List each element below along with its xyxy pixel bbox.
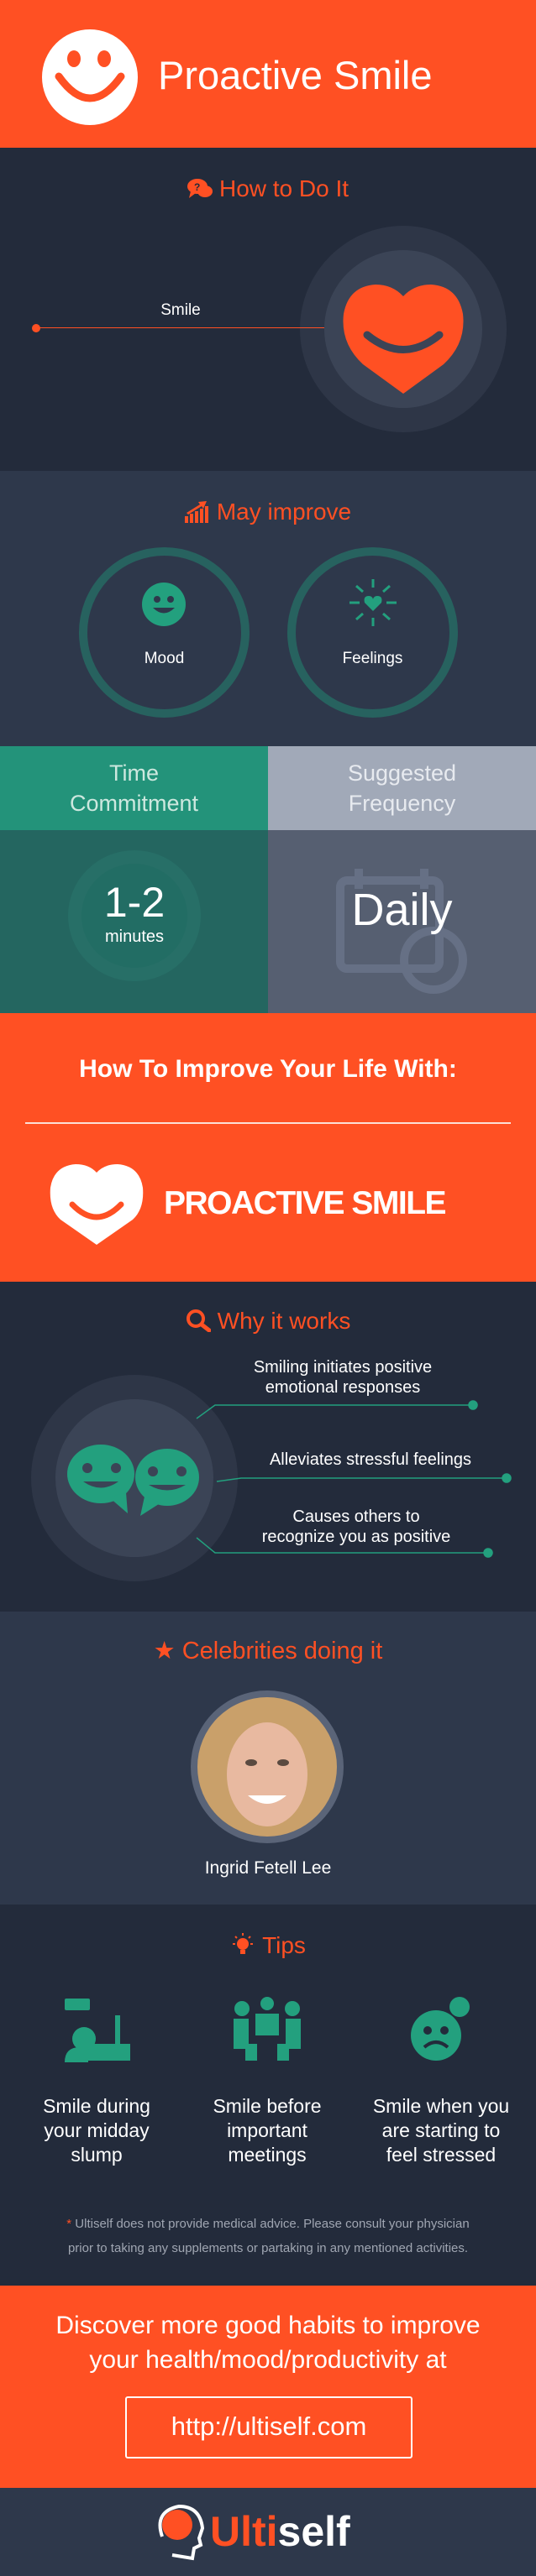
value: Daily [351,885,453,935]
panel: time commitment [0,746,268,1013]
footer logo [0,2488,536,2576]
heading: How To Improve Your Life With: [79,1055,457,1083]
panel: suggested frequency [268,746,536,1013]
text: meetings [228,2144,307,2166]
heading: Tips [262,1932,306,1958]
clock + value [68,850,201,981]
header [268,746,536,830]
icon: feelings [349,579,397,626]
header [0,0,536,148]
reason 3: Causes others to [292,1507,420,1526]
logo text: Ultiself [210,2508,350,2555]
text: Smile when you [373,2095,509,2117]
heading: How to Do It [219,175,349,201]
text [373,2095,509,2166]
tip 3 [373,1997,509,2166]
heading: Why it works [218,1308,350,1334]
reason 1 [254,1358,432,1397]
header: Frequency [349,791,455,816]
header: Suggested [348,760,456,786]
icon [234,1997,301,2061]
label: Feelings [343,650,402,667]
tip 1 [43,1999,150,2166]
label: Mood [145,650,184,667]
reason 1: emotional responses [265,1378,420,1397]
title: PROACTIVE SMILE [164,1185,445,1221]
heading [233,1932,306,1958]
icon [65,1999,130,2062]
text: smile: Smile [160,301,201,319]
reason 3 [262,1507,450,1546]
text [213,2095,322,2166]
reason 3: recognize you as positive [262,1528,450,1546]
connector lines [197,1400,512,1558]
tip 2 [213,1997,322,2166]
reason 1: Smiling initiates positive [254,1358,432,1377]
text: feel stressed [386,2144,496,2166]
icon [411,1997,470,2061]
heading: ★ Celebrities doing it [154,1638,382,1664]
disclaimer: * Ultiself does not provide medical advice. Please consult your physician [66,2217,470,2231]
icon: brain head [158,2505,204,2560]
text [55,2312,481,2374]
panel: may improve [0,471,536,746]
text: slump [71,2144,123,2166]
icon: smiley [42,29,138,125]
panel: how to improve [0,1013,536,1282]
text: your health/mood/productivity at [89,2346,447,2374]
heading: May improve [217,499,351,525]
link box: http://ultiself.com [171,2411,366,2441]
text: Discover more good habits to improve [55,2312,481,2339]
reason 2: Alleviates stressful feelings [270,1450,471,1469]
clock + value: 1-2 [104,879,165,926]
icon: mood [142,583,186,626]
text [43,2095,150,2166]
panel: how to do it [0,148,536,471]
icon: heart logo [50,1164,143,1245]
clock + value: minutes [105,927,164,946]
link box [125,2396,413,2458]
photo [191,1690,344,1843]
circle: mood [79,547,250,718]
panel: why it works [0,1282,536,1612]
heading: ? [194,181,200,193]
icon: chat smileys [31,1375,238,1581]
text: your midday [44,2119,150,2141]
header [0,746,268,830]
header: Time [109,760,159,786]
icon: heart circle [300,226,507,432]
header: Commitment [70,791,198,816]
icon: calendar [336,869,467,994]
panel: celebrities [0,1612,536,1905]
title: Proactive Smile [158,53,432,97]
text: important [227,2119,307,2141]
disclaimer [66,2217,470,2255]
circle: feelings [287,547,458,718]
name: Ingrid Fetell Lee [205,1858,331,1878]
text: Smile during [43,2095,150,2117]
panel: call to action [0,2286,536,2488]
disclaimer: prior to taking any supplements or partaking in any mentioned activities. [68,2241,468,2255]
text: are starting to [382,2119,500,2141]
text: Smile before [213,2095,322,2117]
panel: tips [0,1905,536,2286]
callout line [32,324,324,332]
